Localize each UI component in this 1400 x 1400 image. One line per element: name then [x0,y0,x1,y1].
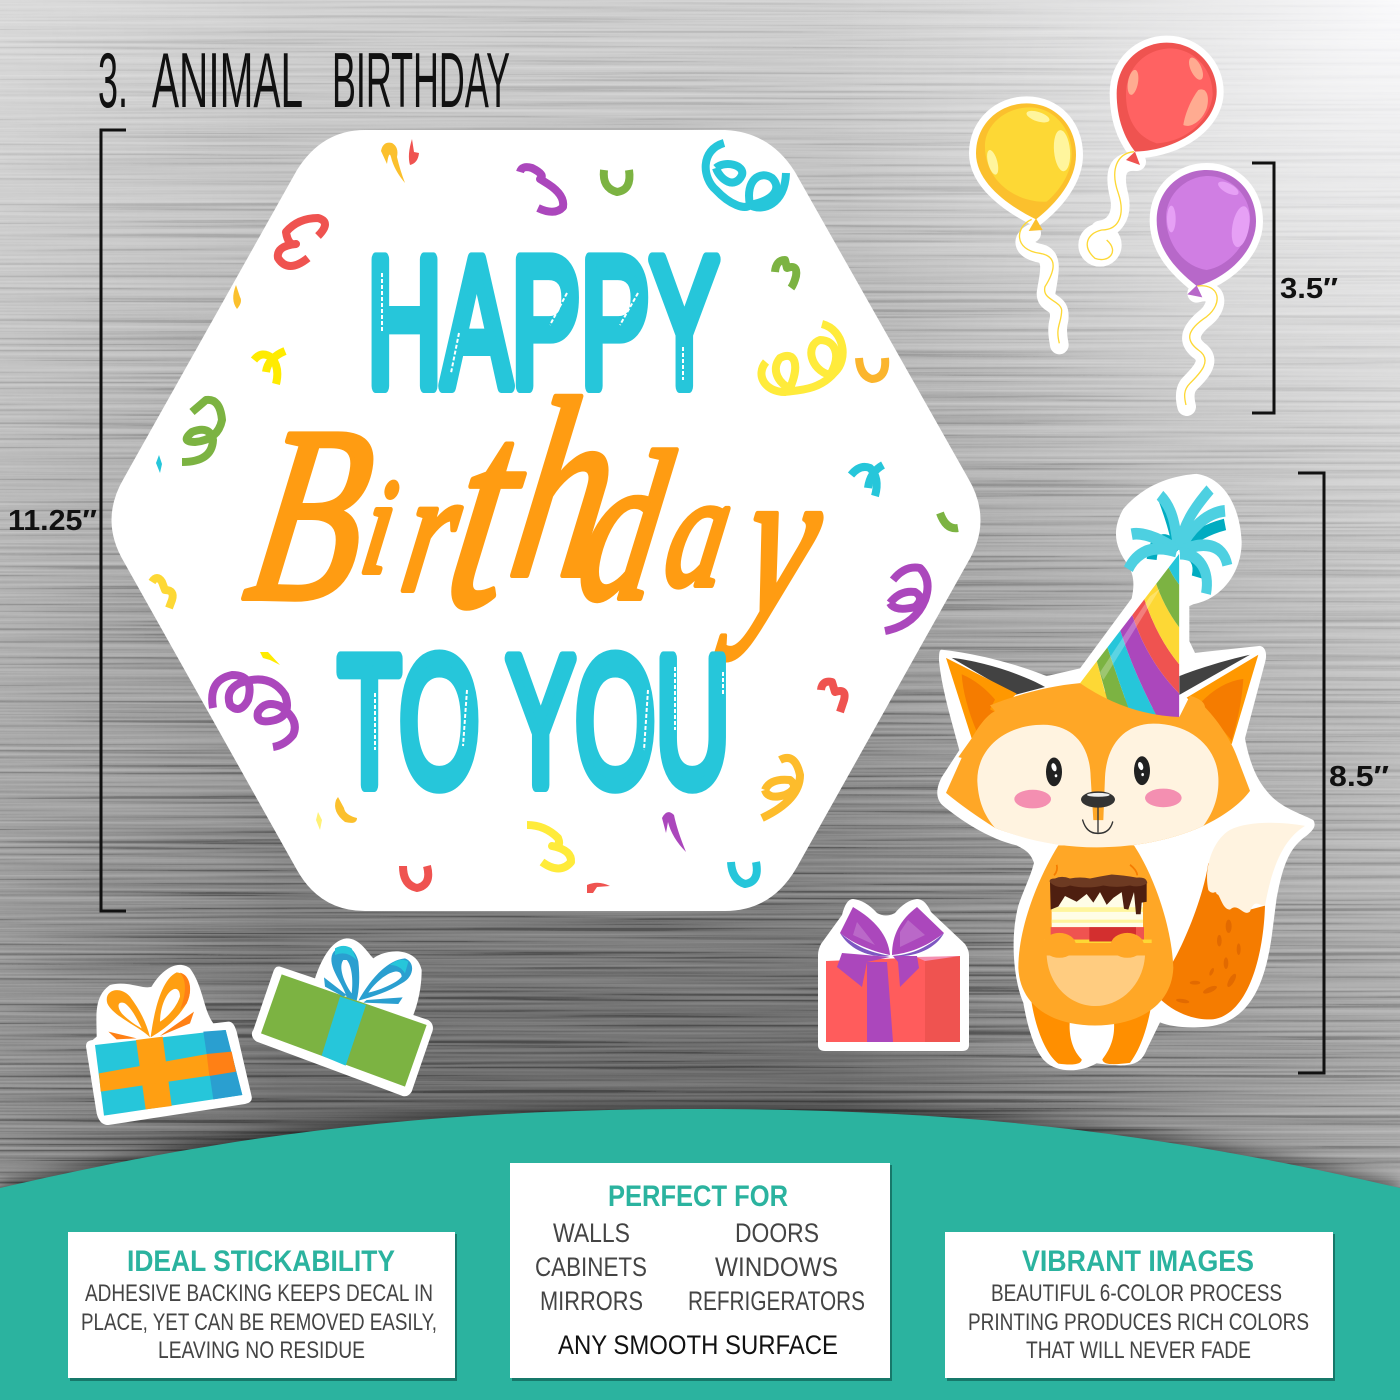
heading: happy: HAPPY [367,219,719,425]
slice of cake [1043,875,1152,958]
dimension bracket: 8.5 inch: 8.5″ [1329,761,1389,793]
panel: hexagon sign [112,130,980,911]
red balloon [1087,43,1217,260]
balloons [976,43,1256,407]
heading: birthday: h [496,346,639,631]
dimension bracket: 8.5 inch [1298,473,1389,1073]
fox sticker outline [937,474,1315,1070]
heading: birthday: B [232,375,391,653]
title: 3. [98,36,128,124]
surfaces list: WINDOWS [715,1252,838,1282]
heading: to you: TO YOU [338,618,730,824]
ears [946,655,1258,744]
body text: ADHESIVE BACKING KEEPS DECAL IN [85,1280,433,1307]
heading: birthday: t [429,352,547,667]
surfaces list: DOORS [735,1218,819,1248]
fox with party hat and cake [937,474,1315,1070]
dimension bracket: 3.5 inch: 3.5″ [1280,273,1338,305]
green gift with blue ribbon [252,938,433,1096]
heading: birthday: d [565,408,685,645]
surfaces list: CABINETS [535,1252,647,1282]
title: ANIMAL [152,36,303,124]
panel: ideal stickability [68,1232,457,1381]
heading: birthday: r [391,435,475,629]
heading: birthday: y [714,422,839,661]
confetti [152,139,958,893]
dimension bracket: 11.25 inch: 11.25″ [8,505,97,537]
panel: vibrant images [945,1232,1335,1381]
surfaces list: REFRIGERATORS [688,1286,865,1316]
purple balloon [1157,170,1256,405]
head [946,683,1250,847]
text: BIRTHDAY [332,36,510,124]
body text: THAT WILL NEVER FADE [1026,1337,1251,1364]
surfaces list [535,1218,865,1316]
body text: PLACE, YET CAN BE REMOVED EASILY, [81,1309,437,1336]
blue gift with orange ribbon [86,965,252,1125]
surfaces list: WALLS [553,1218,630,1248]
teal wave footer [0,1105,1400,1400]
body text: LEAVING NO RESIDUE [158,1337,365,1364]
party hat [1080,554,1180,717]
heading: PERFECT FOR [608,1180,788,1213]
eyes [1046,756,1150,786]
heading: VIBRANT IMAGES [1022,1245,1254,1278]
brush scratches on lettering [375,273,723,780]
gifts: blue and green [86,938,433,1125]
hexagon shape [112,130,980,911]
nose and mouth [1081,791,1115,833]
heading: IDEAL STICKABILITY [127,1245,395,1278]
body [1018,845,1173,1025]
body text: BEAUTIFUL 6-COLOR PROCESS [991,1280,1282,1307]
face [977,724,1218,847]
yellow balloon [976,103,1076,343]
dimension bracket: 11.25 inch [8,130,126,911]
tail [1160,823,1305,1019]
gift: red with purple bow [818,899,969,1051]
body text [81,1280,437,1364]
surfaces list: MIRRORS [540,1286,643,1316]
heading: birthday: i [353,452,407,602]
balloon sticker outline [976,43,1256,407]
body text: PRINTING PRODUCES RICH COLORS [968,1309,1309,1336]
pompom [1128,489,1227,594]
cheeks [1014,789,1182,808]
legs [1031,999,1151,1064]
dimension bracket: 3.5 inch [1252,163,1338,413]
body text [968,1280,1309,1364]
any smooth surface: ANY SMOOTH SURFACE [558,1330,838,1360]
heading: birthday: a [654,441,745,621]
panel: perfect for [510,1163,892,1381]
